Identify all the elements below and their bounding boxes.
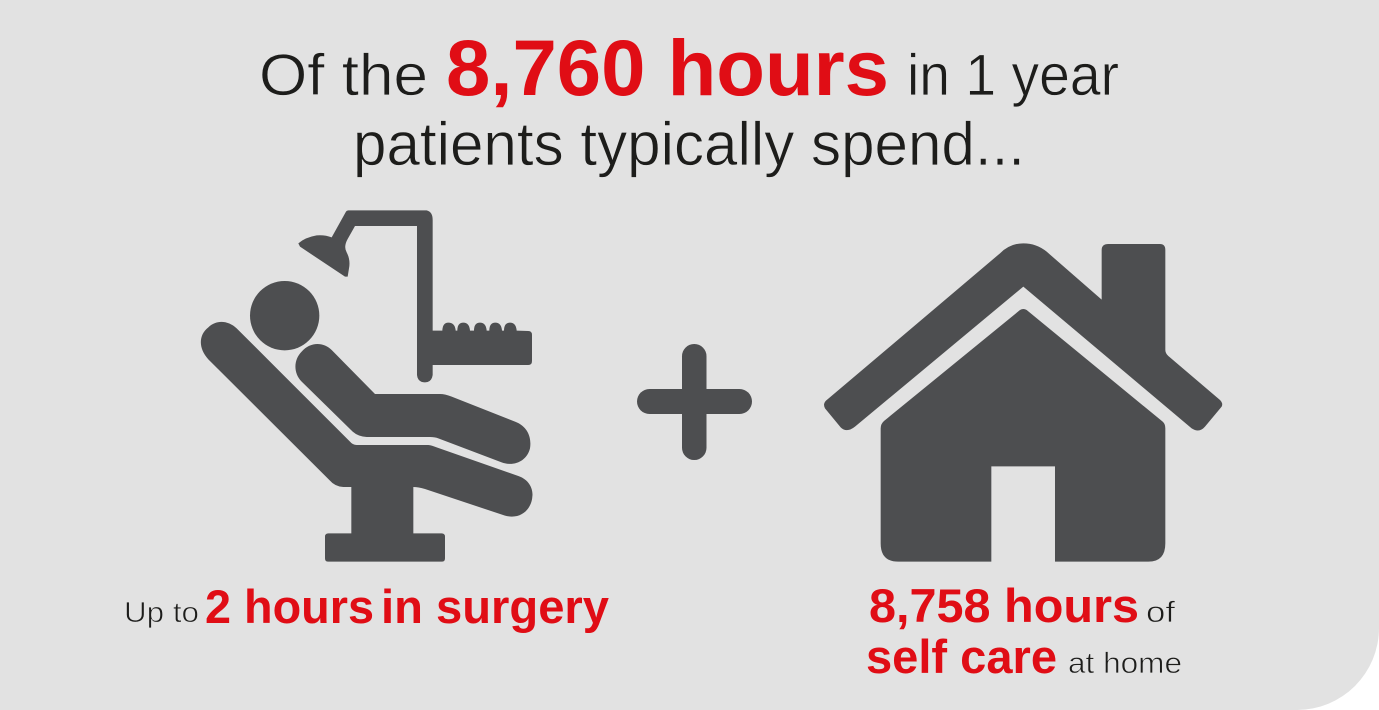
- icon: dental chair: [201, 210, 532, 562]
- title: 8,760 hours: [446, 23, 889, 112]
- house body: [881, 309, 1165, 562]
- patient head: [250, 281, 319, 350]
- title: [259, 23, 1119, 178]
- icon: plus: [637, 344, 752, 460]
- chair: [201, 322, 532, 562]
- title: in 1 year: [907, 43, 1119, 108]
- caption: surgery: Up to: [124, 597, 199, 629]
- lamp and instrument tray: [298, 210, 532, 382]
- caption: self care: of: [1146, 596, 1176, 629]
- caption: surgery: 2 hours: [205, 580, 374, 633]
- caption: self care: at home: [1068, 647, 1182, 680]
- caption: surgery: [124, 580, 609, 633]
- caption: self care: self care: [866, 630, 1057, 683]
- title: patients typically spend...: [353, 110, 1025, 178]
- icon: house: [824, 243, 1222, 562]
- caption: self care: [866, 579, 1182, 683]
- roof and chimney: [824, 243, 1222, 430]
- title: Of the: [259, 43, 428, 108]
- caption: surgery: in surgery: [381, 580, 609, 633]
- patient body: [295, 344, 530, 464]
- caption: self care: 8,758 hours: [869, 579, 1139, 632]
